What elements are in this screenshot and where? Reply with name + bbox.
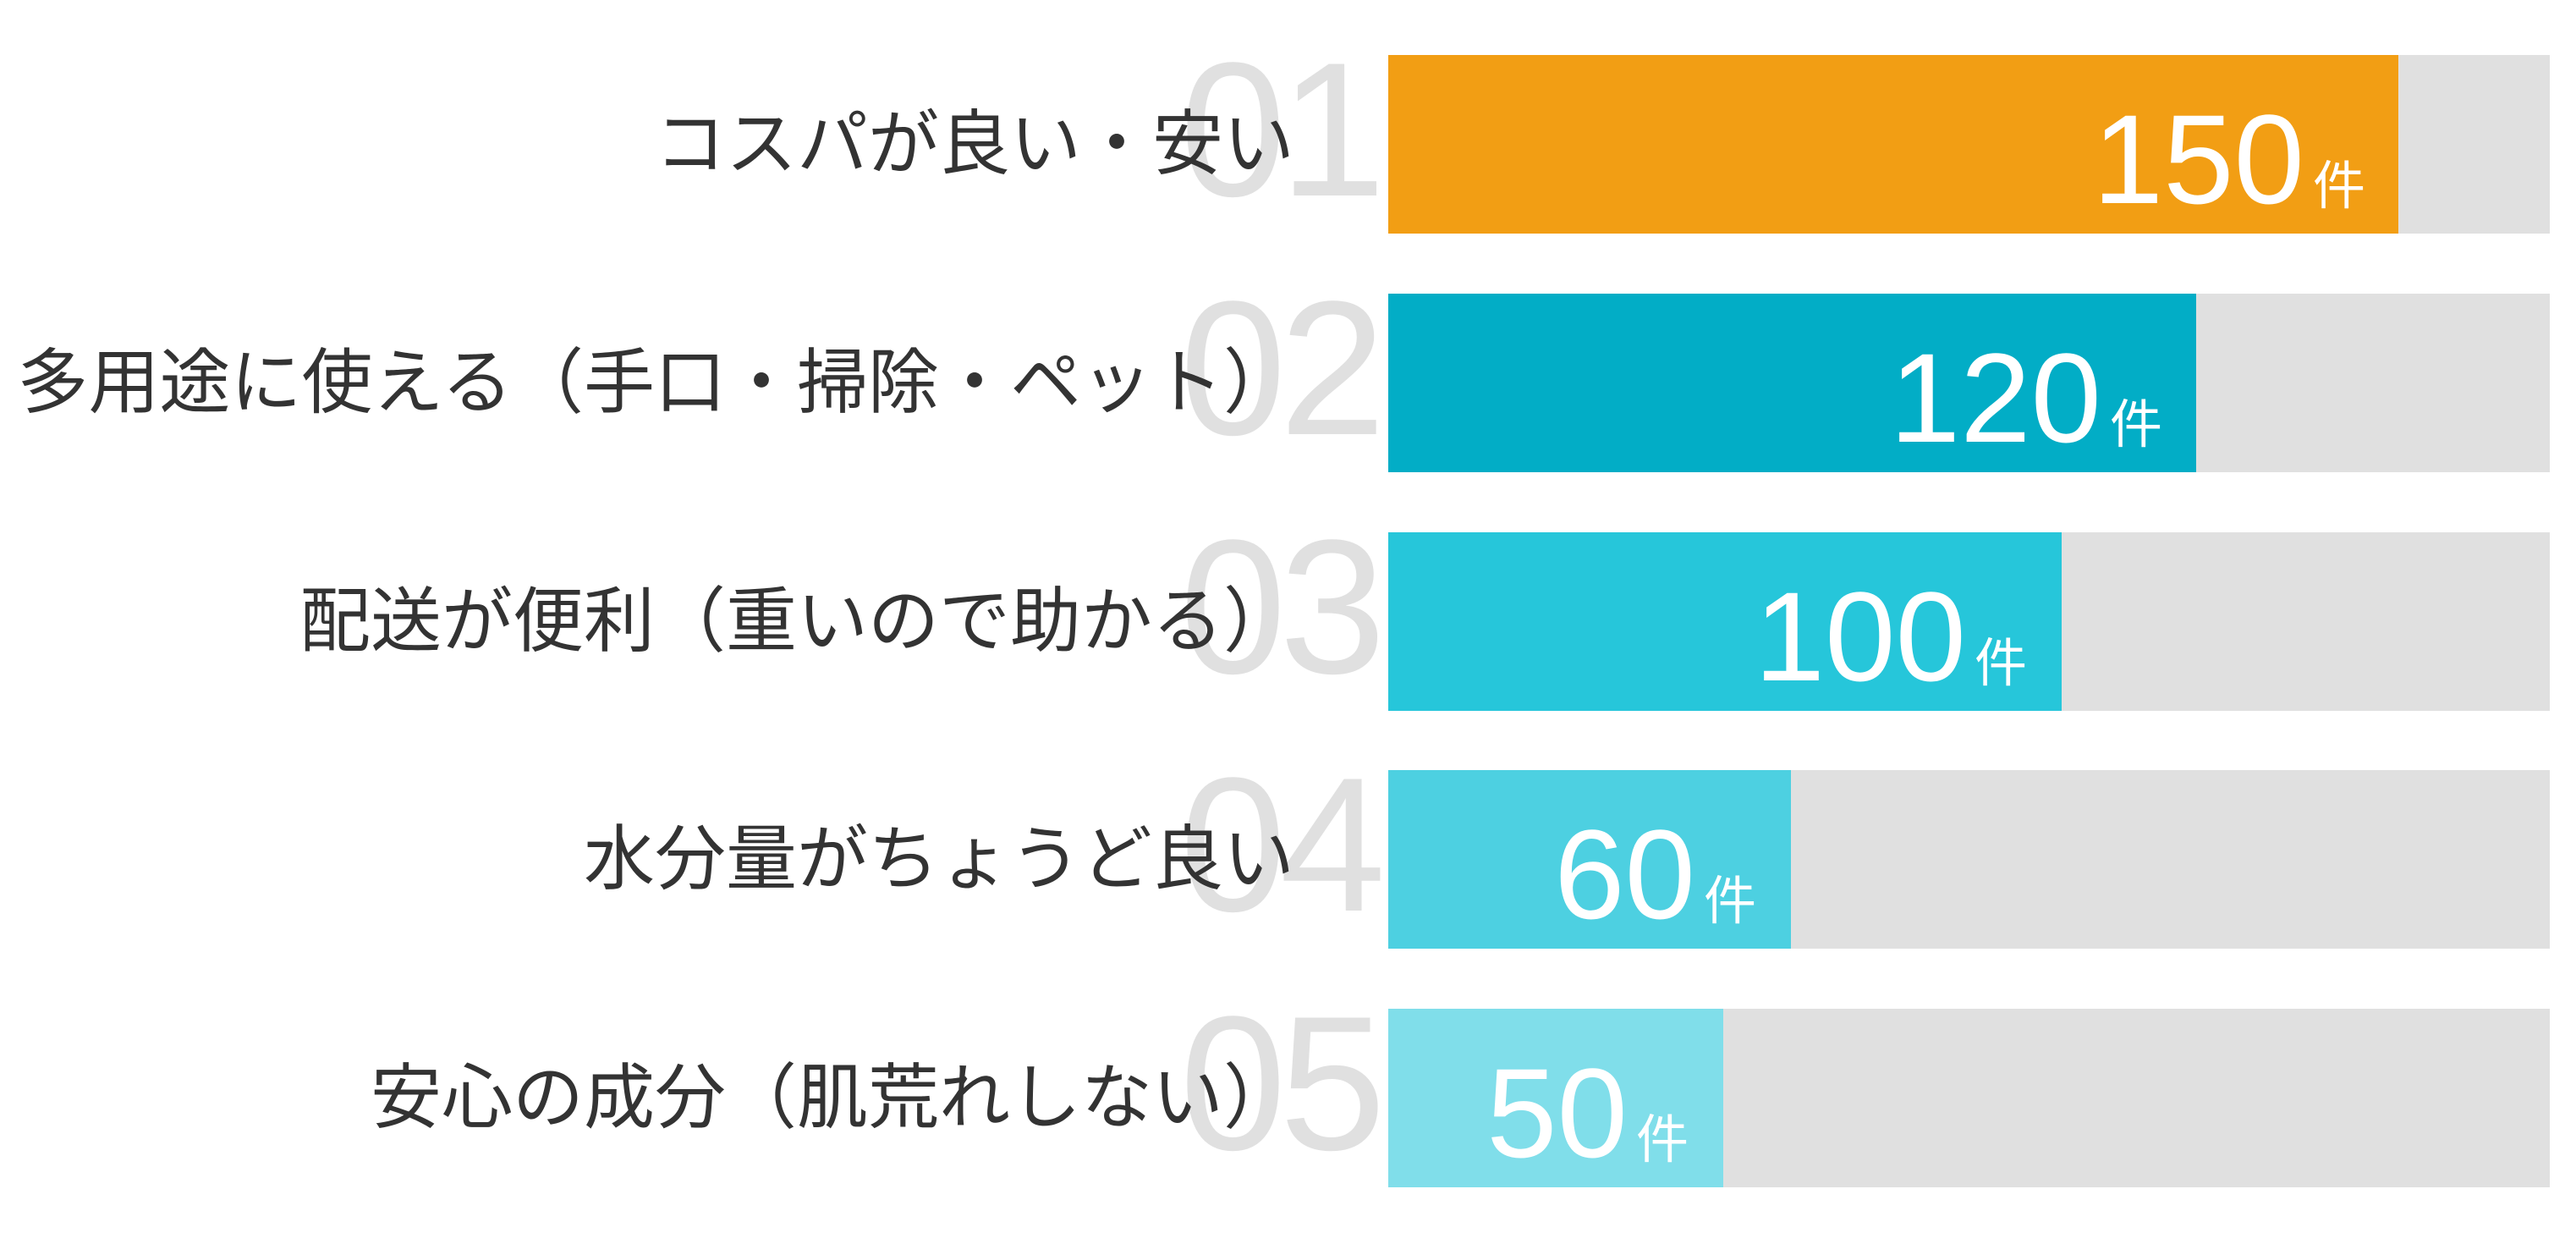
bar 04	[1388, 770, 1791, 949]
rank number 05: 05	[1180, 976, 1379, 1190]
value 03: 件	[1975, 635, 2027, 693]
value 02: 件	[2110, 396, 2162, 454]
value 04: 件	[1704, 872, 1756, 931]
track 01	[1388, 55, 2550, 234]
value 05	[1486, 1042, 1689, 1184]
track 04	[1388, 770, 2550, 949]
rank number 02: 02	[1180, 261, 1379, 475]
label 05: 安心の成分（肌荒れしない）	[371, 1058, 1294, 1137]
label 01: コスパが良い・安い	[655, 104, 1294, 184]
value 03: 100	[1755, 565, 1966, 707]
rank number 01: 01	[1180, 22, 1379, 236]
value 04	[1554, 803, 1756, 945]
value 02: 120	[1890, 327, 2101, 469]
bar 05	[1388, 1009, 1723, 1187]
label 02: 多用途に使える（手口・掃除・ペット）	[18, 343, 1294, 422]
track 03	[1388, 532, 2550, 711]
rank number 03: 03	[1180, 499, 1379, 713]
bar 01	[1388, 55, 2398, 234]
label 04: 水分量がちょうど良い	[584, 819, 1294, 899]
value 05: 50	[1486, 1042, 1628, 1184]
value 01: 150	[2093, 88, 2304, 230]
value 01: 件	[2313, 157, 2365, 216]
row 03	[299, 499, 2550, 713]
row 05	[371, 976, 2550, 1190]
value 04: 60	[1554, 803, 1695, 945]
track 02	[1388, 294, 2550, 472]
value 05: 件	[1636, 1111, 1689, 1170]
bar 03	[1388, 532, 2062, 711]
bar 02	[1388, 294, 2196, 472]
row 02	[18, 261, 2550, 475]
track 05	[1388, 1009, 2550, 1187]
rank number 04: 04	[1180, 737, 1379, 951]
row 04	[584, 737, 2550, 951]
row 01	[655, 22, 2550, 236]
label 03: 配送が便利（重いので助かる）	[299, 581, 1294, 661]
